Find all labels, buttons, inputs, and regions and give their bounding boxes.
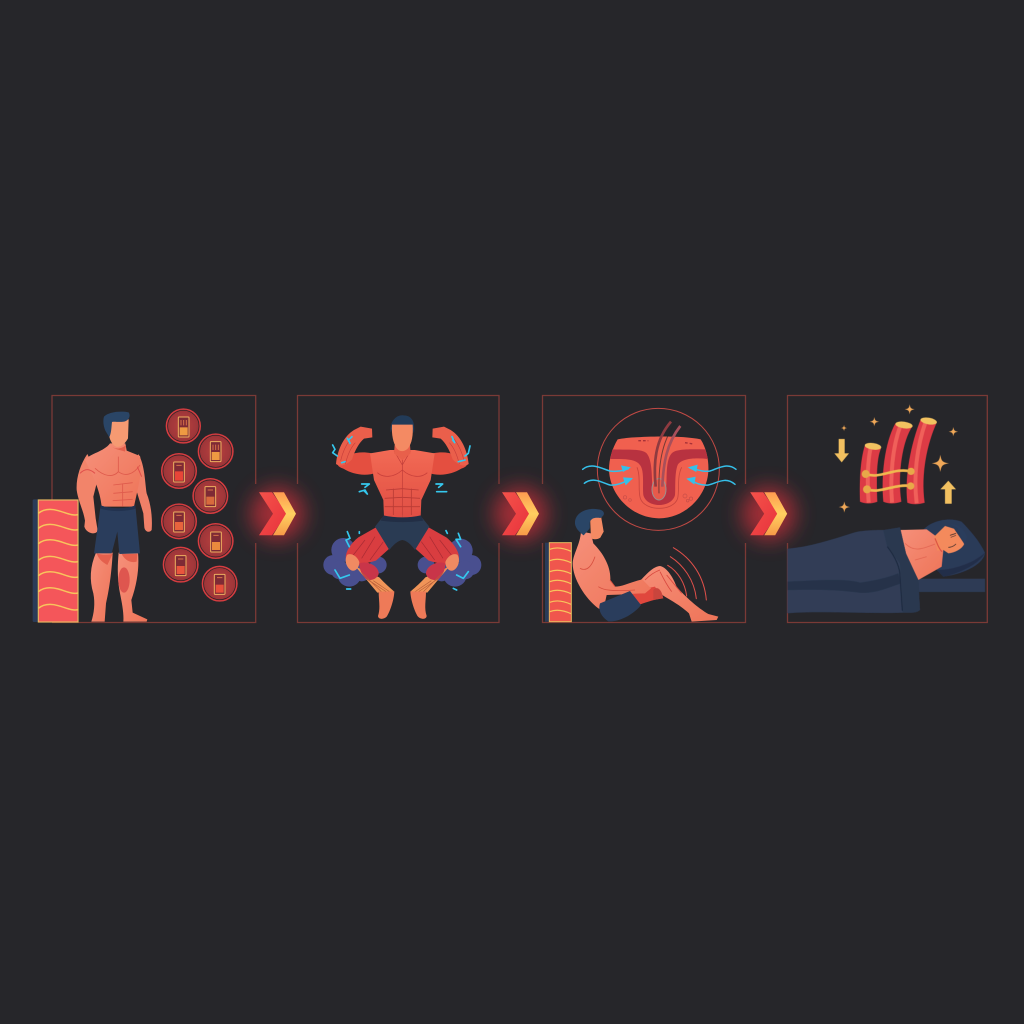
arrow: chevron 3: [742, 487, 796, 541]
panel frame 1: [52, 396, 256, 622]
arrow: chevron 1: [250, 487, 304, 541]
flexing man: [336, 415, 469, 619]
panel frame 2: [298, 396, 499, 622]
knee pain arcs: [668, 548, 706, 600]
panel: sleep and muscle repair: [787, 396, 987, 622]
skin cross-section: [597, 408, 719, 530]
sparkles: [839, 404, 958, 513]
figure content 2: [323, 415, 481, 619]
sleeping man: [900, 524, 967, 580]
figure content 4: [787, 404, 985, 613]
heat pad: [33, 499, 78, 622]
energy sparks: [333, 437, 470, 590]
standing man: [77, 412, 152, 622]
airflow arrows: [583, 465, 736, 485]
panel: hair follicle and recovery: [542, 396, 746, 622]
arrow down and up: [834, 439, 956, 504]
blanket: [787, 527, 920, 613]
figure content 3: [545, 408, 736, 622]
panel frame 3: [542, 396, 746, 622]
sitting man: [573, 509, 718, 622]
panel: muscle damage: [298, 396, 499, 622]
smoke clouds: [323, 538, 481, 587]
muscle fibers: [860, 416, 937, 504]
panel frame 4: [788, 396, 987, 622]
supplement circles: [162, 409, 237, 601]
panel: heat and supplements: [33, 396, 256, 622]
bed and pillow: [917, 519, 985, 592]
arrow: chevron 2: [494, 487, 548, 541]
figure content 1: [33, 409, 237, 622]
heat pad small: [545, 543, 571, 622]
